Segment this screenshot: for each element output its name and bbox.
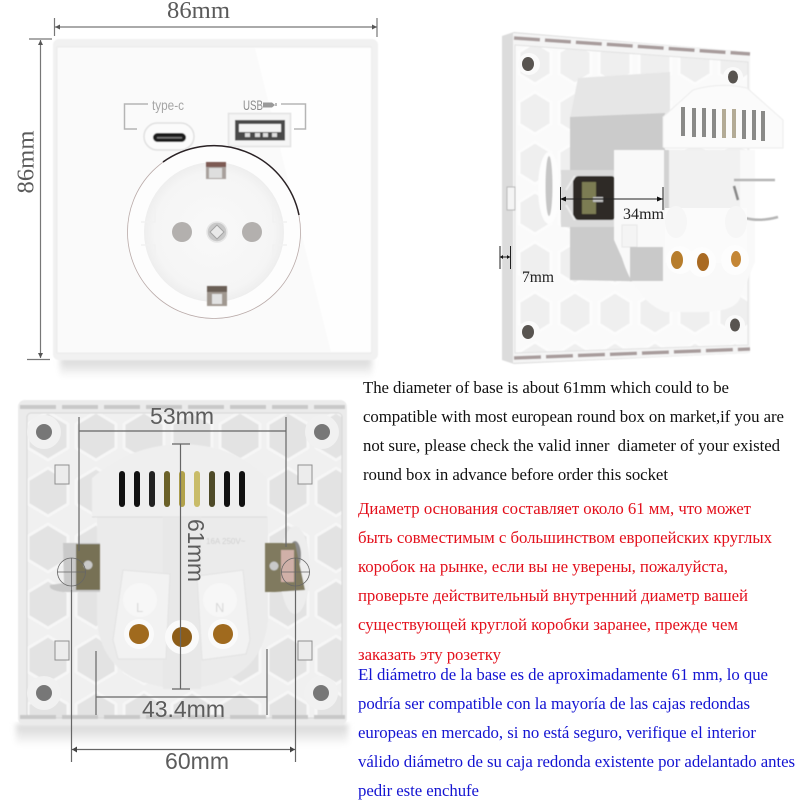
text block: Russian note: коробок на рынке, если вы не уверены, пожалуйста,	[358, 557, 728, 576]
terminal blocks: L	[136, 600, 143, 615]
socket pin holes	[172, 222, 262, 242]
text block: English note	[363, 378, 784, 484]
label and bracket: type-c	[124, 97, 184, 129]
text block: Russian note: существующей круглой коробки заранее, прежде чем	[358, 615, 738, 634]
terminal blocks: N	[215, 600, 224, 615]
icon: USB port	[228, 114, 290, 146]
dimension: thickness 7mm: 7mm	[522, 269, 554, 286]
dimension: height 86mm: 86mm	[12, 130, 40, 194]
dimension: 53mm: 53mm	[150, 403, 214, 429]
text block: Russian note: быть совместимым с большинством европейских круглых	[358, 528, 773, 547]
text block: English note: not sure, please check the valid inner diameter of your existed	[363, 436, 781, 455]
text block: Russian note	[358, 499, 773, 664]
faceplate	[53, 39, 378, 360]
mounting holes	[27, 415, 339, 710]
panel: angled rear view	[500, 32, 783, 364]
top earth contact	[206, 162, 226, 179]
text block: Spanish note: válido diámetro de su caja redonda existente por adelantado antes	[358, 752, 795, 771]
rear plate	[18, 400, 347, 725]
rear plate shadow	[16, 724, 348, 746]
dimension: 53mm	[79, 403, 286, 551]
dimension: width 86mm	[54, 0, 377, 37]
metal bracket	[561, 170, 617, 227]
terminal blocks	[113, 570, 250, 660]
rear plate	[502, 32, 750, 364]
icon: schuko socket	[128, 146, 300, 318]
text block: Russian note: Диаметр основания составляет около 61 мм, что может	[358, 499, 752, 518]
dimension: thickness 7mm	[500, 246, 554, 286]
rear module body	[614, 85, 783, 312]
right metal bracket	[265, 526, 310, 614]
panel: front view of socket	[12, 0, 378, 378]
label and bracket: USB	[243, 97, 306, 129]
panel: flat rear view	[16, 400, 348, 774]
vent slots	[681, 107, 765, 141]
text block: Spanish note	[358, 665, 795, 800]
text block: Spanish note: El diámetro de la base es de aproximadamente 61 mm, lo que	[358, 665, 768, 684]
text block: English note: round box in advance before order this socket	[363, 465, 668, 484]
faceplate shadow	[60, 358, 372, 378]
dimension: 61mm: 61mm	[183, 519, 209, 582]
rear module body: 16A 250V~	[206, 537, 246, 546]
text block: Spanish note: podría ser compatible con la mayoría de las cajas redondas	[358, 694, 750, 713]
dimension: depth 34mm: 34mm	[623, 206, 665, 223]
text block: Spanish note: pedir este enchufe	[358, 781, 479, 800]
dimension: 60mm	[57, 558, 310, 774]
clip tabs	[55, 465, 312, 660]
text block: Russian note: заказать эту розетку	[358, 645, 502, 664]
text block: Russian note: проверьте действительный внутренний диаметр вашей	[358, 586, 748, 605]
text block: Spanish note: europeas en mercado, si no está seguro, verifique el interior	[358, 723, 756, 742]
left metal bracket	[50, 543, 100, 592]
mounting holes	[518, 53, 745, 343]
bottom earth contact	[207, 286, 227, 306]
label and bracket: USB: USB	[243, 97, 263, 113]
dimension: 43.4mm	[96, 649, 267, 722]
terminal screws	[665, 206, 749, 277]
vent slots	[119, 471, 245, 507]
dimension: 61mm	[172, 444, 209, 689]
dimension: height 86mm	[12, 39, 52, 360]
icon: type-c port	[144, 123, 194, 150]
terminal screws	[124, 619, 238, 654]
dimension: 43.4mm: 43.4mm	[142, 696, 225, 722]
dimension: depth 34mm	[560, 187, 665, 223]
label and bracket: type-c: type-c	[152, 97, 184, 113]
dimension: 60mm: 60mm	[165, 748, 229, 774]
rear module body	[92, 444, 268, 689]
centre screw	[207, 222, 227, 242]
text block: English note: The diameter of base is about 61mm which could to be	[363, 378, 729, 397]
metal prongs	[734, 180, 778, 220]
text block: English note: compatible with most european round box on market,if you are	[363, 407, 784, 426]
